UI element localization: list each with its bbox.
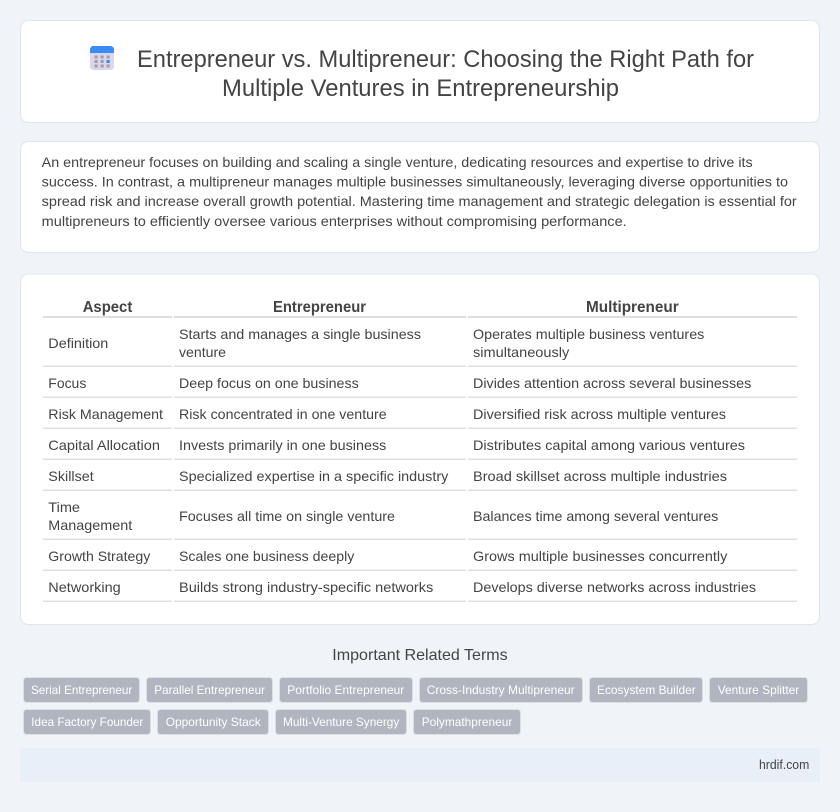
panel: intro paragraph: [20, 142, 820, 252]
row: capital allocation: Capital Allocation: [48, 437, 160, 453]
text block: intro: spread risk and increase overall growth potential. Mastering time management and strategic delegation is essential for: [42, 193, 797, 209]
tag: Portfolio Entrepreneur: Portfolio Entrepreneur: [287, 683, 404, 697]
row: networking: Develops diverse networks across industries: [473, 579, 756, 595]
row: risk management: Risk concentrated in one venture: [179, 406, 387, 422]
title: Multiple Ventures in Entrepreneurship: [222, 75, 619, 102]
tag: Venture Splitter: Venture Splitter: [718, 683, 799, 697]
row: focus: Deep focus on one business: [179, 375, 359, 391]
row: skillset: Skillset: [48, 468, 94, 484]
heading: related terms: Important Related Terms: [332, 647, 508, 664]
tag: Polymathpreneur: [414, 710, 520, 734]
row: definition: Starts and manages a single business: [179, 326, 421, 342]
row: capital allocation: [48, 437, 745, 453]
tag: Idea Factory Founder: [24, 710, 150, 734]
panel: title card: [20, 20, 820, 122]
text block: intro: [42, 154, 797, 229]
row: growth strategy: [48, 548, 727, 564]
tag: Portfolio Entrepreneur: [280, 678, 412, 702]
text block: intro: success. In contrast, a multipreneur manages multiple businesses simultaneously, leveraging diverse opportunities to: [42, 174, 788, 190]
row: skillset: [48, 468, 727, 484]
footer band: [20, 748, 820, 782]
table rules: [43, 316, 797, 602]
table header: Multipreneur: [586, 299, 679, 316]
row: definition: [48, 326, 704, 360]
row: definition: Definition: [48, 335, 108, 351]
row: risk management: [48, 406, 726, 422]
row: risk management: Diversified risk across multiple ventures: [473, 406, 726, 422]
panel: comparison table: [20, 274, 820, 624]
row: capital allocation: Invests primarily in one business: [179, 437, 386, 453]
row: definition: simultaneously: [473, 344, 569, 360]
text block: intro: multipreneurs to efficiently oversee various enterprises without compromising performance.: [42, 213, 627, 229]
row: growth strategy: Growth Strategy: [48, 548, 150, 564]
tag: Multi-Venture Synergy: [276, 710, 406, 734]
tag: Idea Factory Founder: Idea Factory Founder: [31, 715, 143, 729]
table header: Entrepreneur: [273, 299, 366, 316]
footer band: hrdif.com: [759, 758, 809, 772]
row: networking: Builds strong industry-specific networks: [179, 579, 433, 595]
row: time management: Management: [48, 517, 132, 533]
tag: Ecosystem Builder: Ecosystem Builder: [597, 683, 696, 697]
tag: Cross-Industry Multipreneur: Cross-Industry Multipreneur: [427, 683, 575, 697]
row: capital allocation: Distributes capital among various ventures: [473, 437, 745, 453]
row: networking: [48, 579, 756, 595]
icon: calendar: [90, 46, 114, 70]
table header: [83, 299, 679, 316]
tag: Serial Entrepreneur: [24, 678, 140, 702]
row: definition: Operates multiple business ventures: [473, 326, 704, 342]
title: Entrepreneur vs. Multipreneur: Choosing the Right Path for: [137, 46, 754, 73]
row: time management: Time: [48, 499, 80, 515]
row: definition: venture: [179, 344, 226, 360]
row: skillset: Broad skillset across multiple industries: [473, 468, 727, 484]
row: focus: Focus: [48, 375, 86, 391]
row: time management: [48, 499, 718, 533]
table header: Aspect: [83, 299, 133, 316]
tag: Cross-Industry Multipreneur: [420, 678, 582, 702]
tag: Polymathpreneur: Polymathpreneur: [422, 715, 512, 729]
row: time management: Focuses all time on single venture: [179, 508, 395, 524]
tag list: related terms: [24, 678, 808, 734]
tag: Ecosystem Builder: [590, 678, 702, 702]
tag: Venture Splitter: [710, 678, 808, 702]
tag: Opportunity Stack: [158, 710, 268, 734]
row: focus: [48, 375, 751, 391]
tag: Parallel Entrepreneur: Parallel Entrepreneur: [154, 683, 265, 697]
title: [137, 46, 754, 102]
tag: Serial Entrepreneur: Serial Entrepreneur: [31, 683, 132, 697]
row: time management: Balances time among several ventures: [473, 508, 718, 524]
row: focus: Divides attention across several businesses: [473, 375, 751, 391]
tag: Opportunity Stack: Opportunity Stack: [166, 715, 262, 729]
row: skillset: Specialized expertise in a specific industry: [179, 468, 448, 484]
row: risk management: Risk Management: [48, 406, 163, 422]
tag: Parallel Entrepreneur: [146, 678, 272, 702]
row: growth strategy: Grows multiple businesses concurrently: [473, 548, 727, 564]
text block: intro: An entrepreneur focuses on building and scaling a single venture, dedicating resources and expertise to drive its: [42, 154, 753, 170]
row: growth strategy: Scales one business deeply: [179, 548, 354, 564]
tag: Multi-Venture Synergy: Multi-Venture Synergy: [283, 715, 399, 729]
row: networking: Networking: [48, 579, 121, 595]
